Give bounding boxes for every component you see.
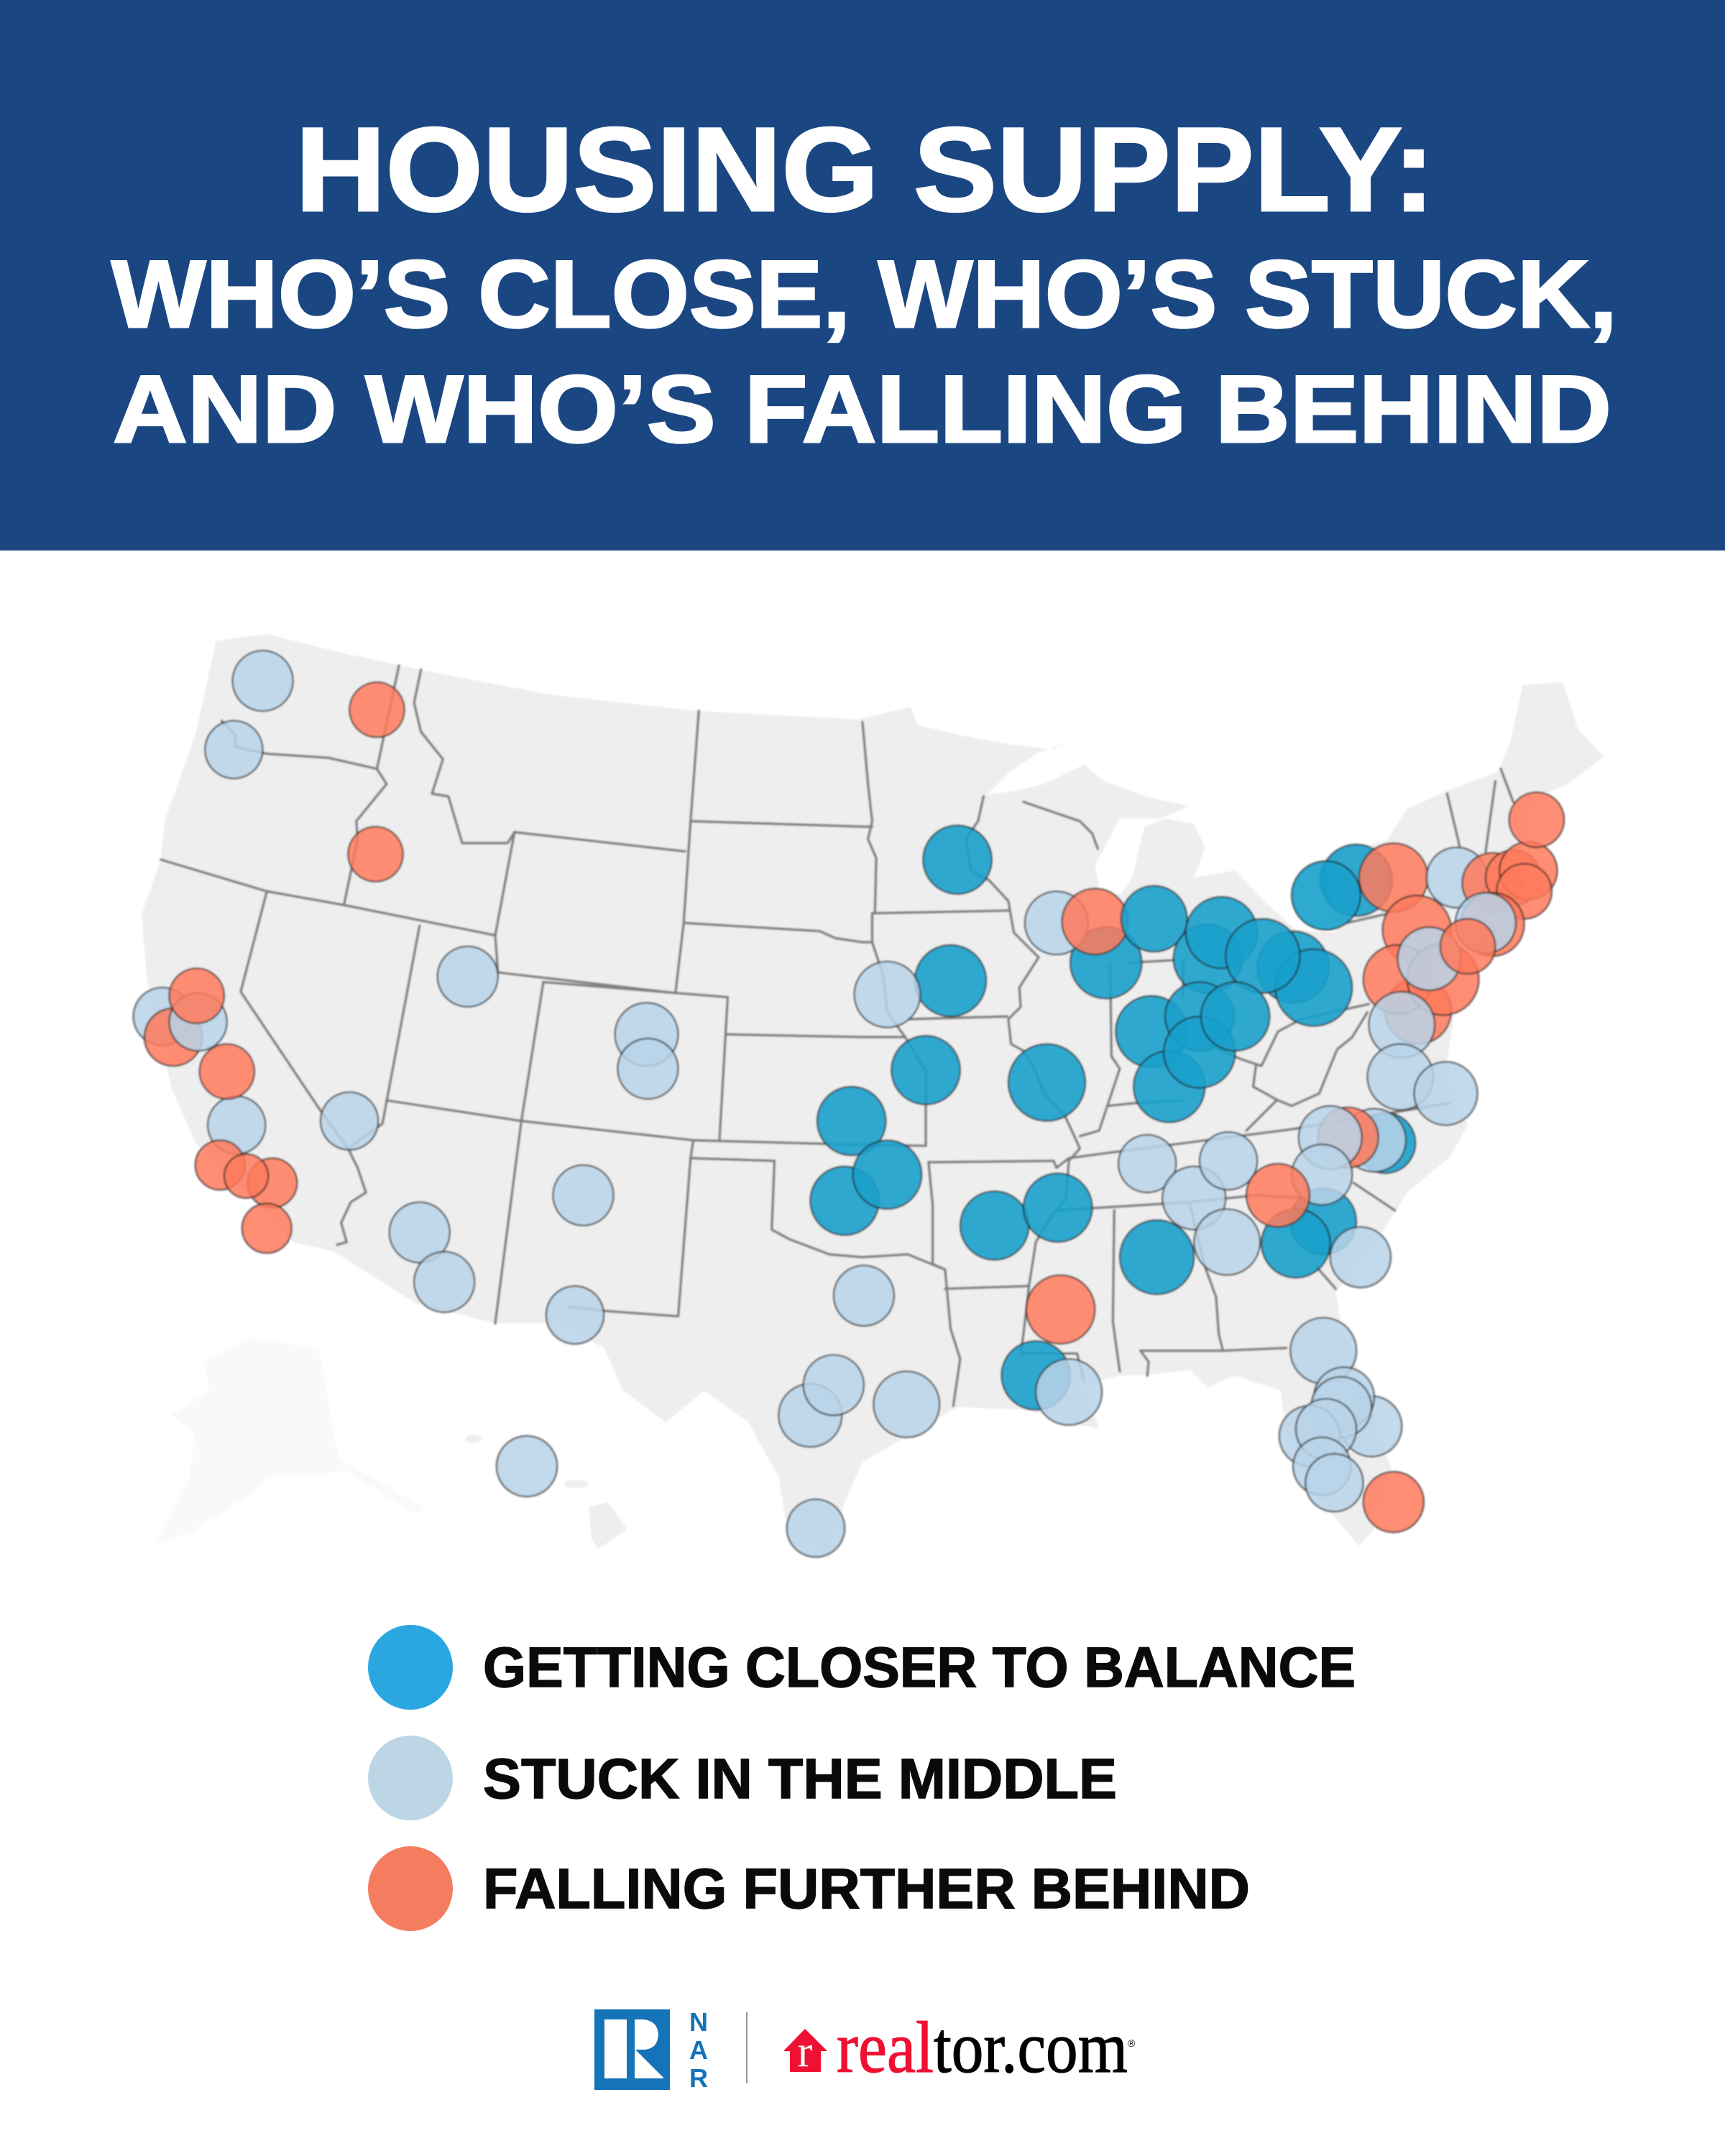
title line 3: AND WHO’S FALLING BEHIND	[113, 356, 1611, 463]
contiguous US land	[142, 634, 1604, 1558]
legend	[368, 1625, 1356, 1931]
logo: NAR: A	[689, 2035, 708, 2065]
markers: Midwest	[1025, 886, 1352, 1123]
logo: realtor.com: real	[837, 2007, 934, 2088]
title line 1: HOUSING SUPPLY:	[295, 103, 1435, 236]
markers: Northeast	[1292, 792, 1564, 1125]
markers: Carolinas	[1246, 1106, 1415, 1227]
logo: NAR	[594, 2007, 708, 2093]
logo: realtor.com: ®	[1128, 2037, 1136, 2049]
state borders	[161, 665, 1513, 1406]
markers: South	[960, 1132, 1391, 1425]
legend item: stuck in the middle	[368, 1736, 1117, 1820]
markers: Plains	[810, 825, 1085, 1235]
legend item: falling further behind	[368, 1846, 1250, 1931]
legend item: getting closer to balance: GETTING CLOSER TO BALANCE	[483, 1635, 1356, 1699]
legend item: falling further behind: FALLING FURTHER BEHIND	[483, 1856, 1250, 1920]
logo: realtor.com	[783, 2007, 1136, 2088]
legend item: stuck in the middle: STUCK IN THE MIDDLE	[483, 1746, 1117, 1810]
icon: red house: r	[798, 2027, 813, 2076]
logo divider	[746, 2012, 748, 2083]
Alaska inset	[155, 1338, 425, 1544]
logo: NAR: R	[689, 2063, 708, 2093]
US map with metro markers	[134, 634, 1604, 1558]
markers: Pacific Northwest	[205, 650, 405, 882]
markers: Florida	[1279, 1318, 1424, 1532]
legend item: getting closer to balance	[368, 1625, 1356, 1710]
markers: California	[134, 968, 297, 1253]
logo: NAR: N	[689, 2007, 708, 2037]
icon: red house	[783, 2027, 827, 2076]
Hawaii inset	[465, 1434, 627, 1549]
logo: realtor.com: tor.com	[934, 2007, 1128, 2088]
markers: Mountain West and Texas	[321, 946, 939, 1557]
header banner	[0, 0, 1725, 550]
title line 2: WHO’S CLOSE, WHO’S STUCK,	[111, 241, 1617, 348]
